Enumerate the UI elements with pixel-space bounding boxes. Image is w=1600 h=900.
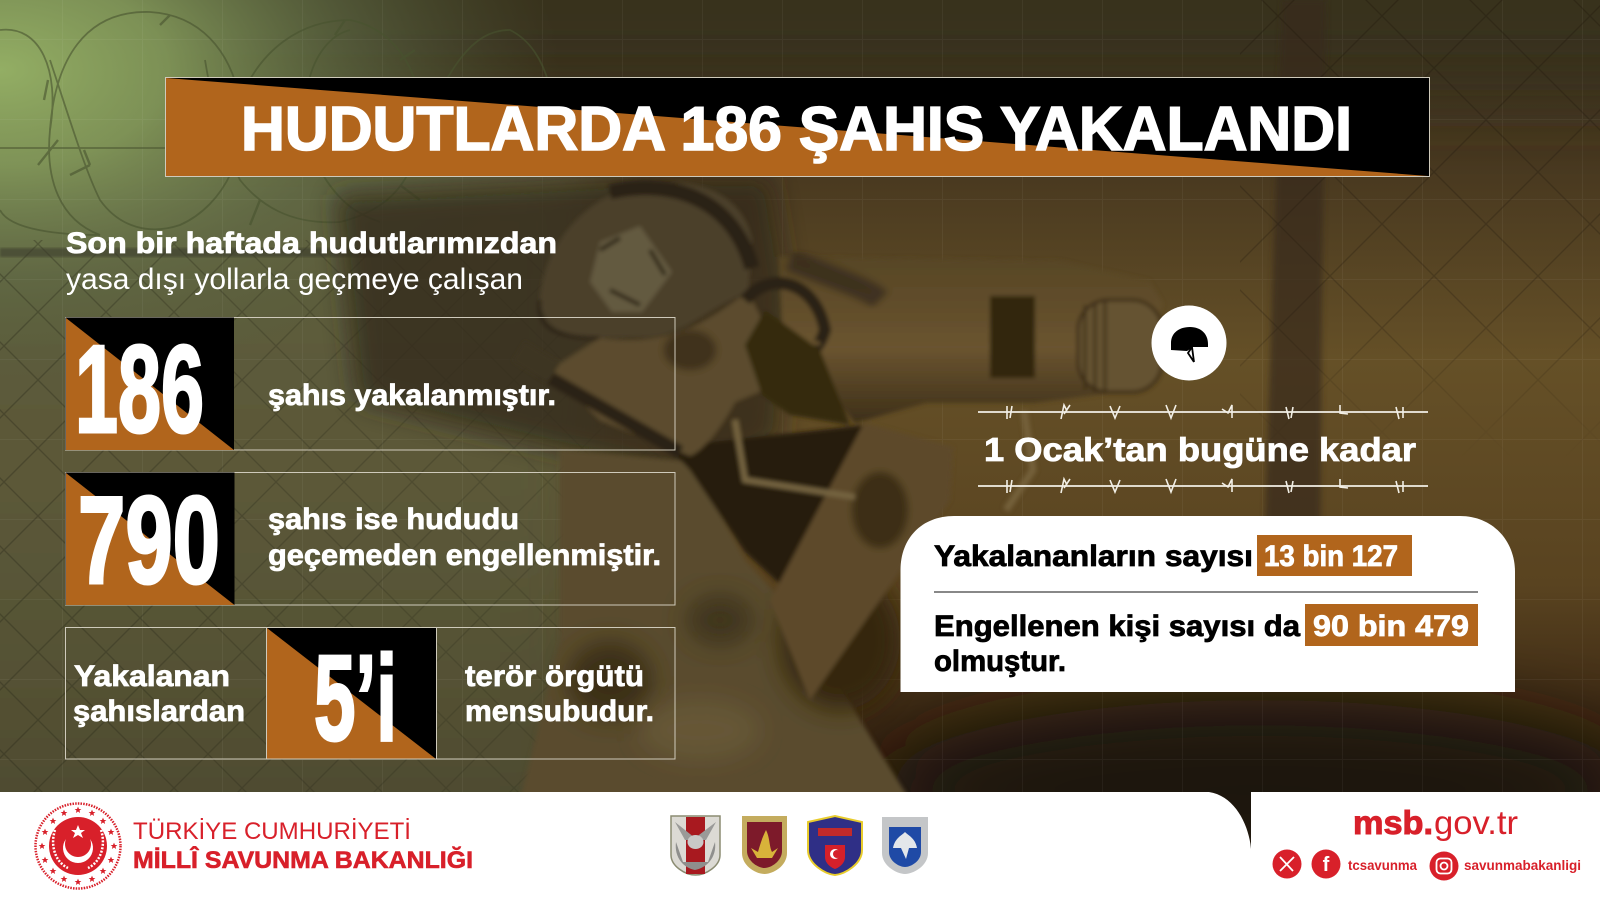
website address xyxy=(1353,804,1518,841)
panel: 5 terror members: mensubudur. xyxy=(465,695,654,728)
icon: land forces shield xyxy=(742,816,787,874)
panel: totals since 1 January: Engellenen kişi sayısı da xyxy=(934,610,1300,643)
title text: HUDUTLARDA 186 ŞAHIS YAKALANDI xyxy=(241,95,1352,164)
panel: 5 terror members xyxy=(66,628,675,766)
title banner xyxy=(166,78,1430,176)
chain link left xyxy=(0,240,558,792)
panel: 5 terror members: Yakalanan xyxy=(74,660,230,693)
panel: totals since 1 January: Yakalananların sayısı xyxy=(934,540,1253,573)
ministry name xyxy=(133,818,473,874)
website address: msb. xyxy=(1353,804,1433,841)
icon: facebook social: f xyxy=(1323,854,1330,876)
barbed wire coils xyxy=(0,12,554,235)
icon: helmet badge xyxy=(1152,306,1226,380)
icon: facebook social xyxy=(1312,850,1340,878)
panel: 5 terror members: şahıslardan xyxy=(73,695,245,728)
icon: X social xyxy=(1272,850,1302,878)
panel: totals since 1 January: 13 bin 127 xyxy=(1264,540,1398,573)
panel: 186 captured: 186 xyxy=(75,321,204,459)
icon: ministry emblem xyxy=(36,804,120,888)
barbed wire divider top xyxy=(978,405,1428,419)
social handle: savunmabakanligi: savunmabakanligi xyxy=(1464,857,1581,873)
soldier xyxy=(335,178,1163,800)
social handle: tcsavunma: tcsavunma xyxy=(1348,857,1417,873)
website address: gov.tr xyxy=(1434,804,1518,841)
panel: 790 prevented: geçemeden engellenmiştir. xyxy=(268,539,661,572)
right post xyxy=(1262,0,1326,620)
panel: 790 prevented xyxy=(66,472,675,610)
barbed wire divider bottom xyxy=(978,479,1428,493)
date heading: 1 Ocak’tan bugüne kadar xyxy=(984,431,1416,468)
panel: totals since 1 January: 90 bin 479 xyxy=(1313,610,1469,643)
intro text xyxy=(66,227,557,296)
footer band xyxy=(0,792,1600,900)
ministry name: MİLLÎ SAVUNMA BAKANLIĞI xyxy=(133,846,473,874)
panel: 186 captured xyxy=(66,318,675,459)
panel: totals since 1 January: olmuştur. xyxy=(934,645,1066,678)
intro text: Son bir haftada hudutlarımızdan xyxy=(66,227,557,260)
intro text: yasa dışı yollarla geçmeye çalışan xyxy=(66,263,523,296)
icon: general staff shield xyxy=(671,816,720,875)
ministry name: TÜRKİYE CUMHURİYETİ xyxy=(133,818,411,845)
icon: instagram social xyxy=(1430,852,1458,880)
panel: 186 captured: şahıs yakalanmıştır. xyxy=(268,379,556,412)
icon: naval forces shield xyxy=(808,816,862,875)
panel: 5 terror members: 5’i xyxy=(314,630,397,766)
panel: 790 prevented: 790 xyxy=(78,472,220,610)
panel: 790 prevented: şahıs ise hududu xyxy=(268,503,519,536)
panel: 5 terror members: terör örgütü xyxy=(465,660,644,693)
icon: air forces shield xyxy=(882,817,928,874)
panel: totals since 1 January xyxy=(900,516,1515,692)
